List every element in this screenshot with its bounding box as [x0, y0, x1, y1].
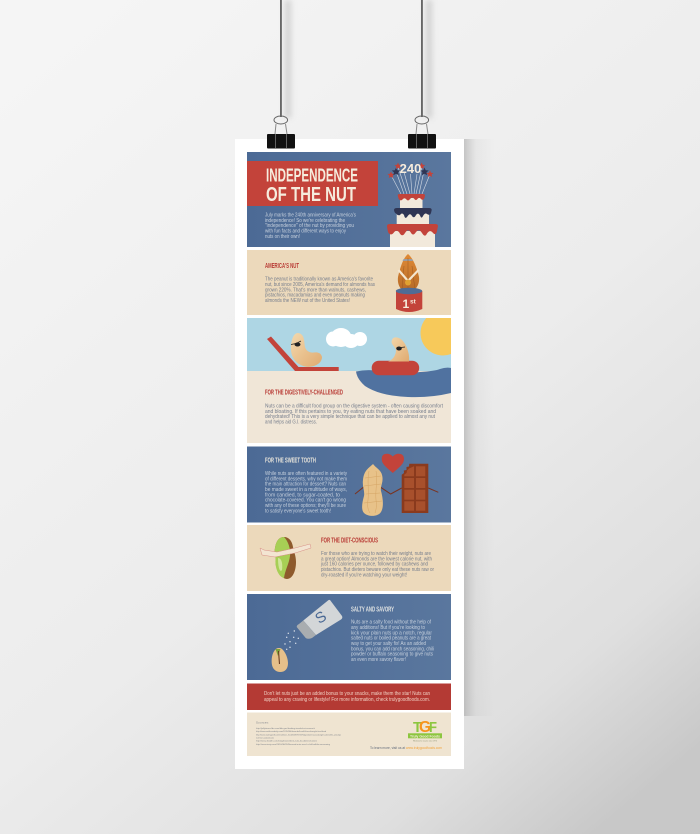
- logo: Truly Good Foods: Wholesome snacks since 1976: [413, 740, 438, 742]
- panel: sources: [247, 712, 451, 756]
- sources text: [256, 720, 341, 746]
- heading: FOR THE DIGESTIVELY-CHALLENGED: [265, 388, 343, 397]
- text: and helps aid G.I. distress.: [265, 419, 317, 425]
- text: Don't let nuts just be an added bonus to your snacks, make them the star! Nuts can: [264, 691, 430, 697]
- text: kick your plain nuts up a notch, regular: [351, 630, 432, 636]
- logo: Truly Good Foods: F: [429, 719, 437, 736]
- icon: swim ring: [372, 361, 419, 375]
- text: from candied, to sugar-coated, to: [265, 492, 340, 498]
- icon: almond on podium: 1: [402, 297, 410, 311]
- icon: water: [356, 368, 451, 397]
- panel: America's nut: [247, 250, 451, 315]
- panel: salty and savory: [247, 594, 451, 680]
- intro text: with fun facts and different ways to enjoy: [265, 229, 346, 235]
- heading: SALTY AND SAVORY: [351, 604, 394, 613]
- text: [265, 403, 444, 425]
- text: dehydrated! This is a very simple technique that can be applied to almost any nut: [265, 414, 436, 420]
- text: be made sweet in a multitude of ways,: [265, 487, 347, 493]
- binder clip left: [267, 116, 295, 148]
- heading: FOR THE SWEET TOOTH: [265, 455, 316, 464]
- text: For those who are trying to watch their weight, nuts are: [321, 551, 431, 557]
- icon: pistachio: [272, 648, 288, 672]
- website line: To learn more, visit us at www.trulygoodfoods.com: [370, 746, 442, 750]
- panel: call to action: [247, 684, 451, 710]
- text: just 160 calories per ounce, followed by cashews and: [320, 562, 428, 568]
- sources text: http://www.health.com/weight-loss/best-nuts-for-dieters/calorie: [256, 740, 317, 743]
- intro text: independence! So we're celebrating the: [265, 218, 345, 224]
- heading: AMERICA'S NUT: [265, 261, 299, 270]
- sources text: http://www.wellnessdaily.com/2015/08/almonds/health/heart/weight-loss/food: [256, 730, 326, 733]
- text: to satisfy everyone's sweet tooth!: [265, 508, 331, 514]
- sources text: Sources:: [256, 720, 269, 724]
- panel: intro: [247, 152, 451, 247]
- sources text: nutrition-soaked-nuts: [256, 736, 274, 740]
- text: almonds the NEW nut of the United States!: [265, 298, 350, 304]
- icon: cloud: [326, 328, 367, 348]
- panel: diet-conscious: [247, 525, 451, 591]
- logo: Truly Good Foods: T: [413, 719, 422, 736]
- icon: peanut and chocolate in love: [355, 454, 438, 516]
- text: salted nuts or boiled peanuts are a great: [351, 636, 432, 642]
- text: pistachios. But dieters beware only eat these nuts raw or: [321, 567, 434, 573]
- icon: birthday cake: [387, 161, 438, 247]
- text: appeal to any craving or lifestyle! For more information, check trulygoodfoods.com.: [264, 697, 430, 703]
- text: any additions! But if you're looking to: [351, 625, 425, 631]
- logo: Truly Good Foods: G: [419, 719, 431, 736]
- icon: cashew in ring: [388, 337, 409, 362]
- sources text: http://www.tasty.com/2016/06/05/flavored-nuts-ranch-chili-buffalo-seasoning: [256, 743, 330, 746]
- text: powder or buffalo seasoning to give nuts: [351, 652, 433, 658]
- icon: almond on podium: st: [410, 298, 417, 306]
- text: Nuts can be a difficult food group on the digestive system - often causing discomfort: [265, 403, 444, 409]
- icon: birthday cake: 240: [400, 161, 421, 176]
- title banner: [247, 161, 378, 206]
- heading: FOR THE DIET-CONSCIOUS: [321, 535, 378, 544]
- text: [351, 620, 434, 663]
- text: a great option! Almonds are the lowest calorie nut, with: [321, 556, 432, 562]
- icon: pistachio with measuring tape: [260, 537, 311, 579]
- text: the main attraction for dessert? Nuts can: [265, 482, 346, 488]
- text: pistachios, macadamias and even peanuts making: [265, 293, 365, 299]
- text: [265, 471, 347, 514]
- text: bonus, you can add ranch seasoning, chili: [351, 646, 434, 652]
- text: nut, but since 2005, America's demand for almonds has: [265, 282, 375, 288]
- text: While nuts are often featured in a variety: [265, 471, 347, 477]
- intro text: July marks the 240th anniversary of America's: [265, 212, 356, 218]
- text: [265, 277, 375, 304]
- text: chocolate-covered. You can't go wrong: [265, 498, 346, 504]
- icon: cashew on chair: [291, 333, 322, 367]
- intro text: [265, 212, 356, 240]
- text: Nuts are a salty food without the help of: [351, 620, 432, 626]
- icon: salt shaker: S: [312, 608, 330, 628]
- text: way to get your salty fix! As an added: [351, 641, 426, 647]
- sources text: http://jollytimes.fda.com/fda-gov/leading-trends/nut-research: [256, 727, 315, 730]
- panel: sweet tooth: [247, 446, 451, 522]
- text: dry-roasted if you're watching your weight!: [321, 572, 407, 578]
- text: of different desserts, why not make them: [265, 476, 347, 482]
- icon: salt shaker: [284, 600, 342, 650]
- text: with any of these options; they'll be sure: [265, 503, 346, 509]
- text: The peanut is traditionally known as America's favorite: [265, 277, 373, 283]
- text: [264, 691, 430, 703]
- icon: almond on podium: [396, 254, 422, 312]
- text: grown 220%. That's more than walnuts, cashews,: [265, 287, 366, 293]
- intro text: "independence" of the nut by providing you: [265, 223, 354, 229]
- paper sheet: [235, 139, 464, 769]
- illustration: beach scene: [247, 318, 451, 398]
- binder clip right: [408, 116, 436, 148]
- text: an even more savory flavor!: [351, 657, 406, 663]
- logo: Truly Good Foods: [408, 719, 442, 742]
- icon: lounge chair: [267, 336, 339, 371]
- icon: sun: [420, 318, 451, 356]
- text: and bloating. If this pertains to you, try eating nuts that have been soaked and: [265, 409, 436, 415]
- sources text: http://www.eatingwell.com/nutrition_health/28787-87/digestion/nut-soaking/nut-benefits-and-tips: [256, 734, 341, 736]
- logo: Truly Good Foods: Truly Good Foods: [410, 734, 440, 738]
- panel: digestively-challenged: [247, 318, 451, 443]
- title banner: INDEPENDENCE: [266, 166, 358, 186]
- title banner: OF THE NUT: [266, 184, 356, 206]
- intro text: nuts on their own!: [265, 234, 300, 240]
- text: [320, 551, 434, 578]
- hanging wires: [280, 0, 432, 118]
